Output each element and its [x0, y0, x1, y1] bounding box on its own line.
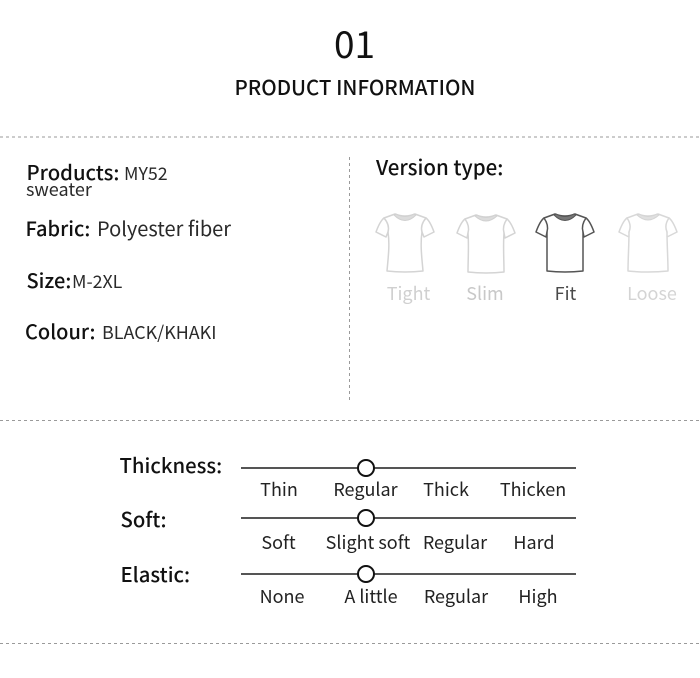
text: fabric: Fabric: [26, 213, 90, 242]
label: fit: Fit [555, 280, 577, 306]
scale: elastic: Elastic: [120, 558, 190, 588]
text: size: Size: [26, 265, 71, 294]
label: slim: Slim [466, 280, 504, 306]
text: colour: Colour: [25, 316, 95, 345]
scale: thickness: Thicken [500, 476, 566, 502]
scale: elastic: High [518, 583, 558, 609]
text: colour: BLACK/KHAKI [102, 319, 216, 345]
icon: tight t-shirt [376, 214, 434, 272]
icon: slim t-shirt [457, 215, 515, 273]
text: products: sweater [26, 176, 93, 202]
scale: soft: Slight soft [326, 529, 411, 555]
heading: product information: PRODUCT INFORMATION [235, 71, 475, 101]
scale: thickness: Thick [423, 476, 469, 502]
icon: fit t-shirt (selected) [536, 214, 594, 272]
label: tight: Tight [387, 280, 431, 306]
text: colour [25, 316, 216, 345]
text: products: MY52 [124, 160, 168, 186]
text: size: M-2XL [72, 268, 123, 294]
scale: thickness [120, 449, 576, 502]
scale: soft: Hard [513, 529, 555, 555]
text: size [26, 265, 123, 294]
text: fabric: Polyester fiber [97, 213, 231, 242]
icon: loose t-shirt [619, 214, 677, 272]
scale: elastic: Regular [424, 583, 489, 609]
heading: version type: Version type: [375, 151, 503, 181]
text: products: Products: [26, 156, 119, 186]
text: products [26, 156, 168, 202]
panel: version type [375, 151, 677, 306]
text: fabric [26, 213, 231, 242]
scale: thickness: Regular [333, 476, 399, 502]
scale: elastic [120, 558, 576, 609]
scale: thickness: Thin [260, 476, 298, 502]
scale: soft: Soft [261, 529, 296, 555]
title: section number: 01 [334, 15, 375, 69]
panel: fabric scales [120, 449, 576, 609]
label: loose: Loose [627, 280, 677, 306]
panel: product details [25, 156, 231, 345]
scale: soft [120, 503, 576, 555]
scale: thickness: Thickness: [120, 449, 222, 479]
scale: soft: Regular [423, 529, 488, 555]
scale: soft: Soft: [120, 503, 167, 533]
scale: elastic: None [260, 583, 304, 609]
scale: elastic: A little [344, 583, 398, 609]
